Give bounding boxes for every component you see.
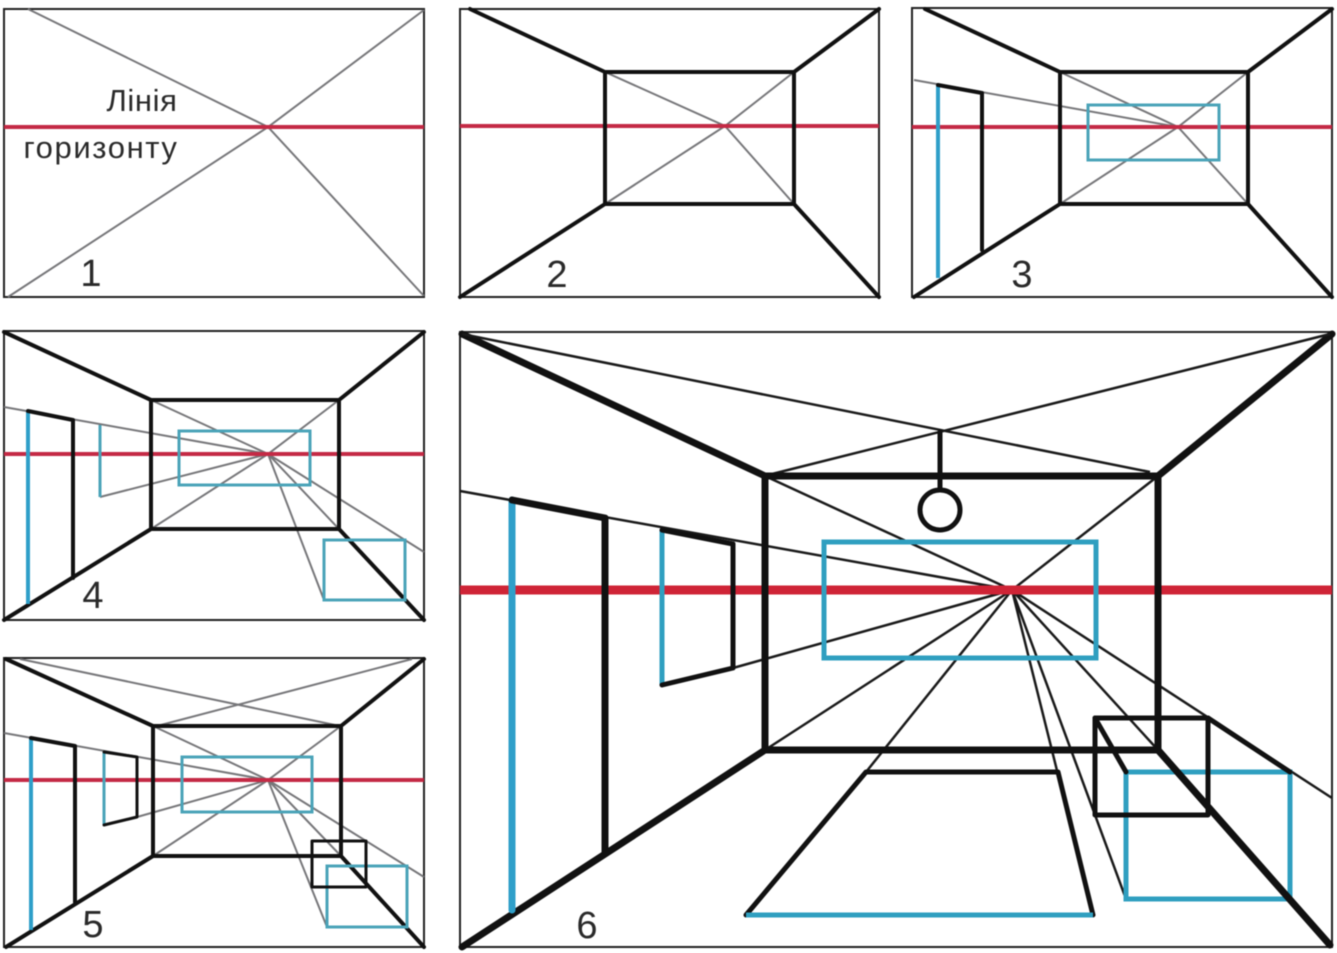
- number 2: 2: [546, 254, 568, 296]
- floor rug: [746, 772, 1093, 915]
- horizon line: [460, 586, 1332, 594]
- panel 3: room with door and back window: [912, 8, 1332, 297]
- door: [938, 85, 982, 278]
- panel 5: room with ceiling lines and floor box: [4, 658, 424, 947]
- side window: [98, 425, 102, 497]
- hanging lamp: [920, 432, 960, 530]
- floor corner edge: [1158, 750, 1330, 945]
- panel 4: room with door, side window and floor rug: [4, 331, 424, 620]
- back wall window: [824, 542, 1096, 658]
- back wall window: [179, 431, 310, 485]
- label: horizon line second row: горизонту: [23, 130, 179, 165]
- number 5: 5: [82, 904, 104, 946]
- panel 6: completed room in one-point perspective: [460, 332, 1332, 947]
- back wall window: [1088, 105, 1219, 160]
- floor box: [312, 841, 366, 887]
- side window: [104, 752, 137, 825]
- floor rectangle: [1126, 772, 1290, 899]
- door: [31, 738, 75, 930]
- number 6: 6: [576, 905, 598, 947]
- number 3: 3: [1011, 254, 1033, 296]
- back wall: [765, 476, 1158, 750]
- label: horizon line: Лінія: [106, 83, 178, 118]
- back wall window: [182, 757, 312, 812]
- box: [1095, 718, 1290, 815]
- door: [512, 500, 605, 910]
- number 4: 4: [82, 575, 104, 617]
- floor rectangle: [324, 540, 405, 600]
- door: [28, 411, 73, 604]
- panel 2: back wall of the room: [460, 9, 879, 297]
- panel 1: horizon line and diagonals: [4, 9, 424, 297]
- side window: [662, 530, 733, 685]
- floor rectangle: [327, 866, 407, 927]
- number 1: 1: [80, 253, 102, 295]
